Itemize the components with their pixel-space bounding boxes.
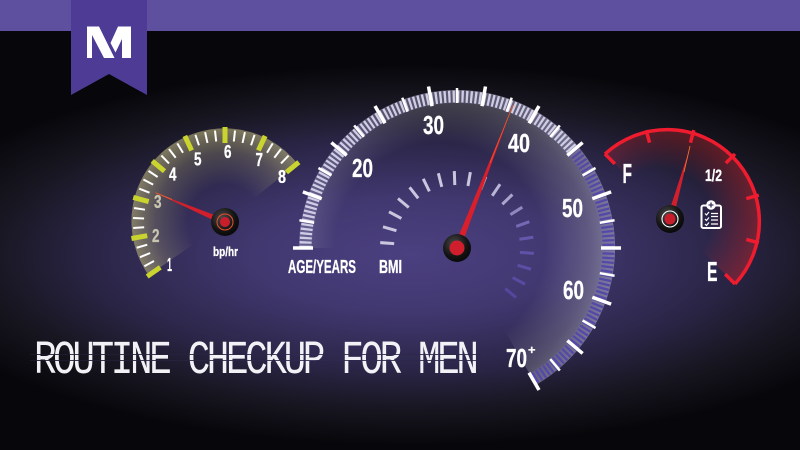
tachometer numbers: 4 [169,164,176,184]
speedometer wedge [299,90,615,385]
tachometer numbers: 1 [167,255,172,275]
tachometer minor ticks [133,131,289,266]
BMI scale ticks [380,171,534,297]
speedometer gauge [288,86,621,390]
tachometer numbers: 3 [154,192,162,212]
fuel gauge [605,130,759,287]
age scale numbers: 40 [508,128,530,158]
age scale numbers [352,110,584,373]
tachometer unit label: bp/hr [213,245,238,259]
fuel wedge [605,130,759,284]
top band [0,0,800,31]
icon: clipboard [702,200,721,228]
age scale numbers: 20 [352,153,373,183]
fuel label half: 1/2 [705,166,722,185]
tachometer numbers: 7 [256,150,263,170]
fuel label E: E [707,256,718,287]
tachometer hub [211,208,239,236]
age scale hash marks [306,96,609,379]
age scale numbers: 30 [423,110,444,140]
age scale band [306,96,608,379]
age scale numbers: 60 [563,275,584,305]
speedometer needle [454,105,513,250]
tachometer numbers: 6 [224,142,232,162]
logo mark [87,26,131,58]
tachometer major ticks [131,127,299,276]
logo ribbon [71,0,147,95]
tachometer numbers: 5 [194,150,202,170]
age scale major ticks [293,86,621,390]
age scale numbers: + [528,343,536,357]
fuel label F: F [622,158,632,189]
age scale minor ticks [299,88,615,371]
fuel arc [605,130,759,284]
age label: AGE/YEARS [288,257,356,277]
speedometer hub [443,234,471,262]
tachometer needle [156,193,226,225]
age scale numbers: 50 [562,193,583,223]
fuel hub [656,205,684,233]
BMI label: BMI [379,257,402,277]
tachometer numbers [152,142,286,275]
tachometer numbers: 8 [278,167,286,187]
age scale numbers: 70 [506,343,527,373]
tachometer gauge [131,127,299,276]
fuel needle [667,146,690,220]
tachometer numbers: 2 [152,226,160,246]
title: ROUTINE CHECKUP FOR MEN [34,334,479,387]
fuel ticks [605,130,759,284]
tachometer wedge [131,128,297,275]
